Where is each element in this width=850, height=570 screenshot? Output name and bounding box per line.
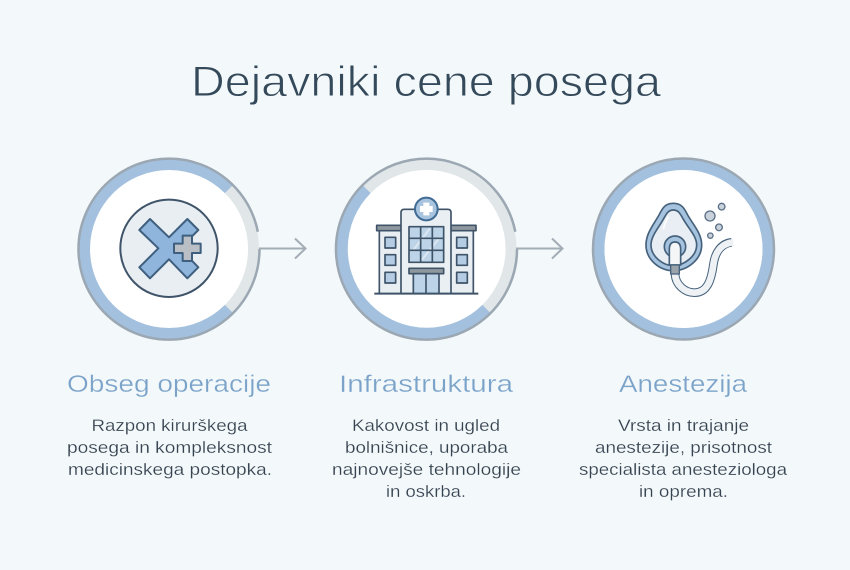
arrow 2 xyxy=(516,238,562,258)
icon: anesthesia mask xyxy=(646,203,733,293)
panel: infrastructure xyxy=(332,159,521,501)
text: anesthesia description xyxy=(579,416,788,501)
text: anesthesia description: anestezije, prisotnost xyxy=(595,438,772,457)
heading: Obseg operacije: Obseg operacije xyxy=(67,371,271,398)
ring 1 xyxy=(79,159,260,340)
ring 2 xyxy=(336,159,517,340)
panel: anesthesia xyxy=(579,158,788,501)
title: Dejavniki cene posega xyxy=(191,58,661,106)
text: anesthesia description: specialista anesteziologa xyxy=(579,460,788,479)
text: infrastructure description: Kakovost in ugled xyxy=(352,416,500,435)
heading: Anestezija: Anestezija xyxy=(619,371,748,398)
icon: hospital xyxy=(374,198,478,294)
text: infrastructure description: in oskrba. xyxy=(386,482,466,501)
ring 3 xyxy=(593,158,774,340)
text: infrastructure description: bolnišnice, uporaba xyxy=(345,438,509,457)
arrow 1 xyxy=(259,238,306,258)
icon: surgical cross xyxy=(120,200,218,297)
text: scope description xyxy=(67,416,272,479)
text: anesthesia description: in oprema. xyxy=(639,482,728,501)
text: scope description: medicinskega postopka. xyxy=(68,460,272,479)
panel: scope of operation xyxy=(67,159,272,479)
text: scope description: Razpon kirurškega xyxy=(92,416,248,435)
heading: Infrastruktura: Infrastruktura xyxy=(339,371,514,398)
text: infrastructure description xyxy=(332,416,521,501)
text: anesthesia description: Vrsta in trajanje xyxy=(618,416,749,435)
text: infrastructure description: najnovejše tehnologije xyxy=(332,460,521,479)
text: scope description: posega in kompleksnost xyxy=(67,438,272,457)
